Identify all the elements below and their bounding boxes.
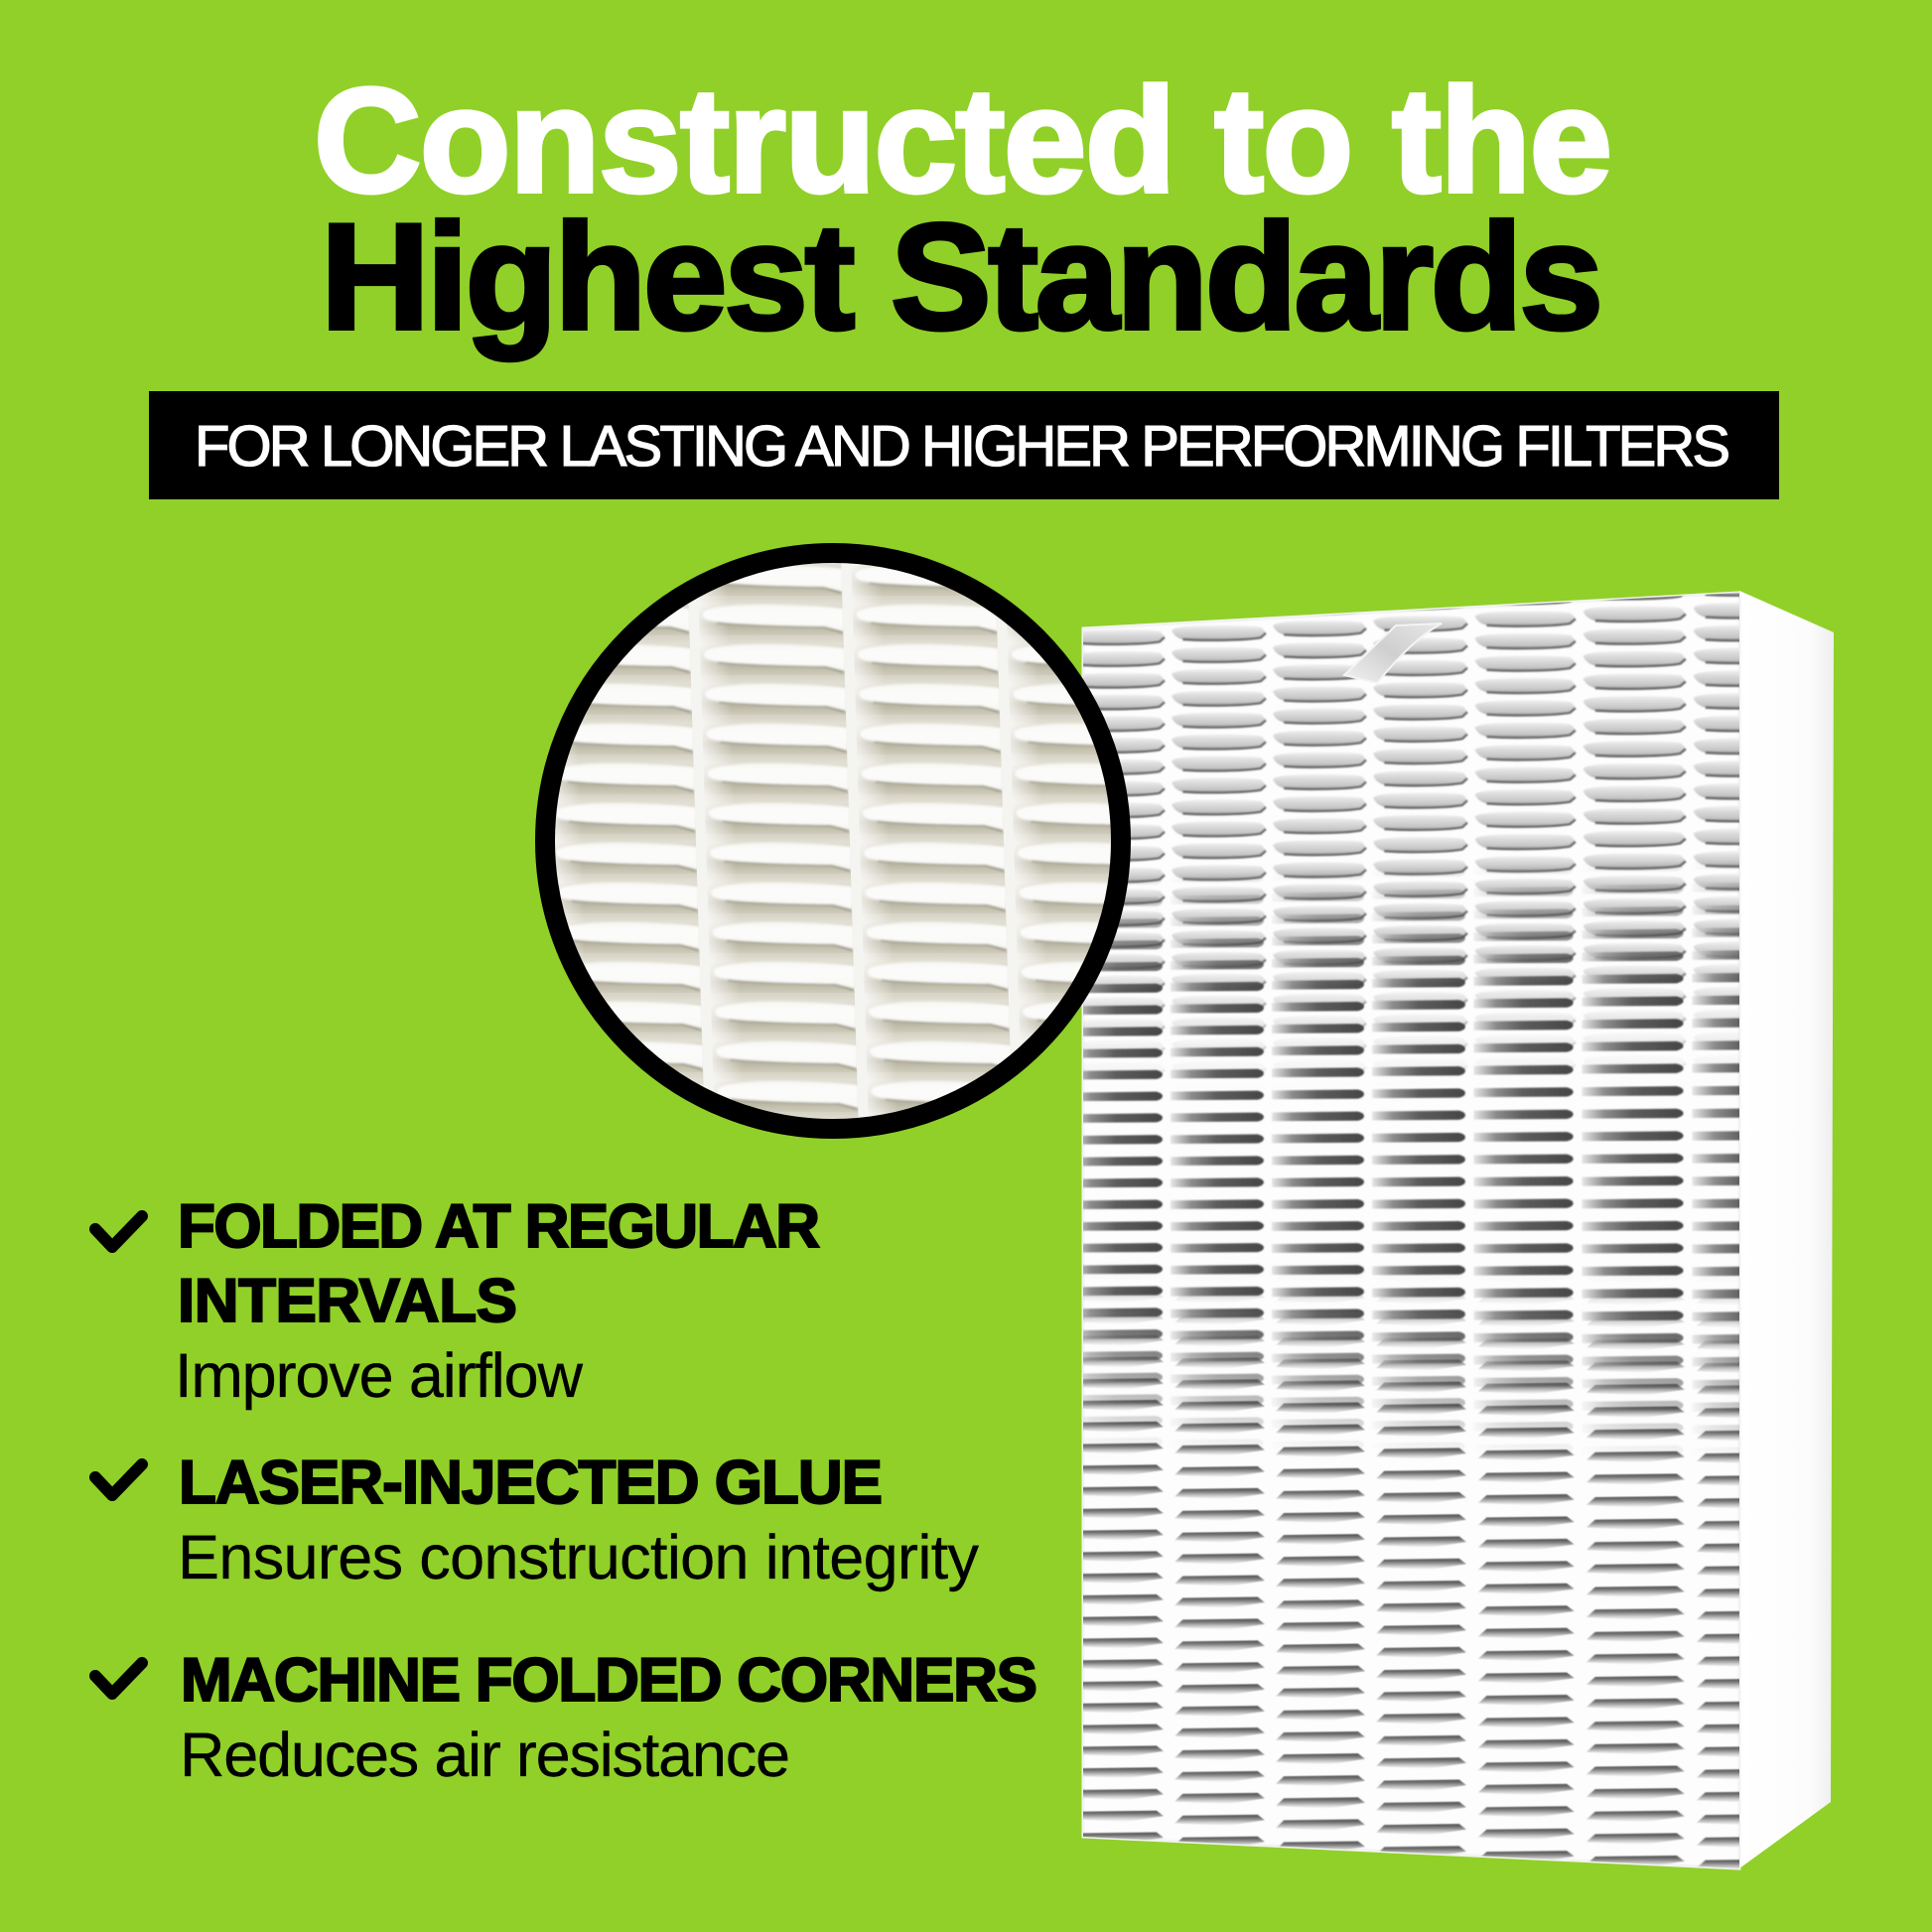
feature heading line 1: FOLDED AT REGULAR bbox=[178, 1192, 820, 1261]
feature list bbox=[95, 1192, 1037, 1790]
filter product illustration bbox=[1082, 591, 1834, 1870]
icon: check bbox=[95, 1464, 142, 1495]
title bbox=[314, 57, 1612, 361]
filter side face bbox=[1739, 591, 1834, 1868]
feature: machine folded corners bbox=[95, 1646, 1037, 1790]
feature: folded at regular intervals bbox=[95, 1192, 820, 1411]
filter pull tab bbox=[1344, 623, 1442, 683]
filter front face base bbox=[1083, 593, 1739, 1868]
banner: subtitle bbox=[149, 391, 1779, 499]
magnified circle bbox=[545, 553, 1121, 1129]
feature: laser-injected glue bbox=[95, 1449, 979, 1592]
feature heading: LASER-INJECTED GLUE bbox=[179, 1449, 883, 1517]
title line 2: Highest Standards bbox=[321, 193, 1603, 361]
feature heading: MACHINE FOLDED CORNERS bbox=[181, 1646, 1037, 1715]
feature description: Improve airflow bbox=[175, 1341, 584, 1411]
filter pleats bbox=[1083, 593, 1739, 1868]
feature heading line 2: INTERVALS bbox=[178, 1267, 517, 1335]
magnified pleat texture bbox=[550, 558, 1116, 1124]
feature description: Reduces air resistance bbox=[180, 1721, 790, 1790]
circle border bbox=[545, 553, 1121, 1129]
banner text: FOR LONGER LASTING AND HIGHER PERFORMING FILTERS bbox=[195, 414, 1730, 479]
feature description: Ensures construction integrity bbox=[178, 1523, 979, 1592]
icon: check bbox=[95, 1216, 142, 1247]
title line 1: Constructed to the bbox=[314, 57, 1612, 223]
banner background bbox=[149, 391, 1779, 499]
icon: check bbox=[95, 1663, 142, 1694]
